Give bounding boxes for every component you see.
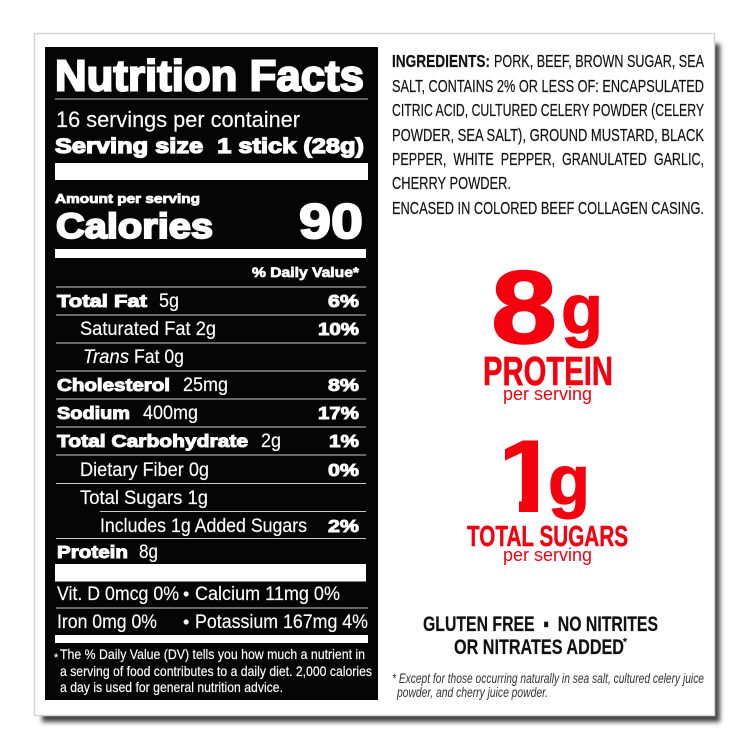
row: total fat: 6% (328, 291, 360, 311)
claims: gluten free, no nitrites (423, 613, 658, 659)
micronutrients row 1: Vit. D 0mcg 0% (57, 583, 179, 605)
row: total carbohydrate: Total Carbohydrate (57, 431, 248, 451)
ingredients text: CHERRY POWDER. (392, 173, 511, 193)
claims: gluten free, no nitrites: OR NITRATES ADDED (454, 636, 624, 659)
callout: 8g protein: PROTEIN (483, 348, 613, 394)
row: added sugars: 2% (328, 516, 360, 536)
row: trans fat (83, 346, 184, 368)
serving size: Serving size 1 stick (28g) (55, 134, 364, 158)
row: trans fat: Trans (83, 346, 129, 368)
servings per container: 16 servings per container (56, 107, 300, 132)
row: total fat: 5g (159, 290, 179, 312)
row: cholesterol (57, 374, 360, 396)
row: total carbohydrate: 2g (261, 430, 281, 452)
callout: 1g total sugars: g (548, 441, 590, 519)
row: total fat (57, 290, 360, 312)
amount per serving: Amount per serving (55, 191, 200, 206)
row: dietary fiber (80, 459, 360, 481)
ingredients text (392, 51, 704, 218)
claims: gluten free, no nitrites: * (623, 637, 627, 648)
micronutrients row 1: Calcium 11mg 0% (195, 583, 340, 605)
heading: Nutrition Facts: Nutrition Facts (55, 52, 364, 100)
micronutrients row 1: • (183, 584, 189, 604)
row: total carbohydrate (57, 430, 360, 452)
callout: 8g protein (483, 250, 613, 404)
daily value footnote: The % Daily Value (DV) tells you how much a nutrient in (60, 646, 365, 662)
row: total carbohydrate: 1% (329, 431, 360, 451)
panel: nutrition facts (45, 47, 378, 700)
row: saturated fat: Saturated Fat 2g (80, 318, 216, 340)
row: sodium: 400mg (143, 402, 198, 424)
row: dietary fiber: 0% (328, 460, 360, 480)
callout: 1g total sugars: TOTAL SUGARS (467, 521, 628, 553)
daily value footnote: a day is used for general nutrition advice. (60, 679, 283, 695)
row: cholesterol: 8% (328, 375, 360, 395)
micronutrients row 2: Potassium 167mg 4% (195, 611, 368, 633)
micronutrients row 1 (57, 583, 340, 605)
callout: 8g protein: 8 (491, 250, 557, 366)
row: saturated fat (80, 318, 360, 340)
row: cholesterol: Cholesterol (57, 375, 170, 395)
row: sodium (57, 402, 360, 424)
row: sodium: Sodium (57, 403, 130, 423)
ingredients text: INGREDIENTS: (392, 51, 490, 71)
row: cholesterol: 25mg (183, 374, 228, 396)
callout: 1g total sugars: per serving (503, 545, 592, 565)
calories value: 90 (299, 195, 363, 249)
micronutrients row 2: Iron 0mg 0% (57, 611, 157, 633)
row: total sugars: Total Sugars 1g (80, 487, 208, 509)
callout: 1g total sugars (467, 440, 628, 565)
calories label: Calories (56, 207, 213, 246)
row: protein: 8g (139, 541, 158, 563)
daily value header: % Daily Value* (252, 265, 360, 280)
row: total fat: Total Fat (57, 291, 147, 311)
footnote: nitrites exception (392, 671, 704, 700)
callout: 1g total sugars: 1 (490, 419, 566, 535)
row: saturated fat: 10% (318, 319, 360, 339)
row: protein (57, 541, 158, 563)
claims: gluten free, no nitrites: GLUTEN FREE ▪ NO NITRITES (423, 613, 658, 636)
micronutrients row 2 (57, 611, 368, 633)
row: dietary fiber: Dietary Fiber 0g (80, 459, 209, 481)
callout: 8g protein: per serving (503, 384, 592, 404)
daily value footnote: * (54, 652, 59, 664)
row: protein: Protein (57, 542, 128, 562)
row: sodium: 17% (318, 403, 360, 423)
daily value footnote (54, 646, 372, 695)
row: trans fat: Fat 0g (134, 346, 184, 368)
micronutrients row 2: • (183, 612, 189, 632)
callout: 8g protein: g (561, 270, 603, 348)
daily value footnote: a serving of food contributes to a daily diet. 2,000 calories (60, 663, 372, 679)
row: added sugars: Includes 1g Added Sugars (100, 515, 307, 537)
footnote: nitrites exception: powder, and cherry juice powder. (396, 685, 548, 700)
